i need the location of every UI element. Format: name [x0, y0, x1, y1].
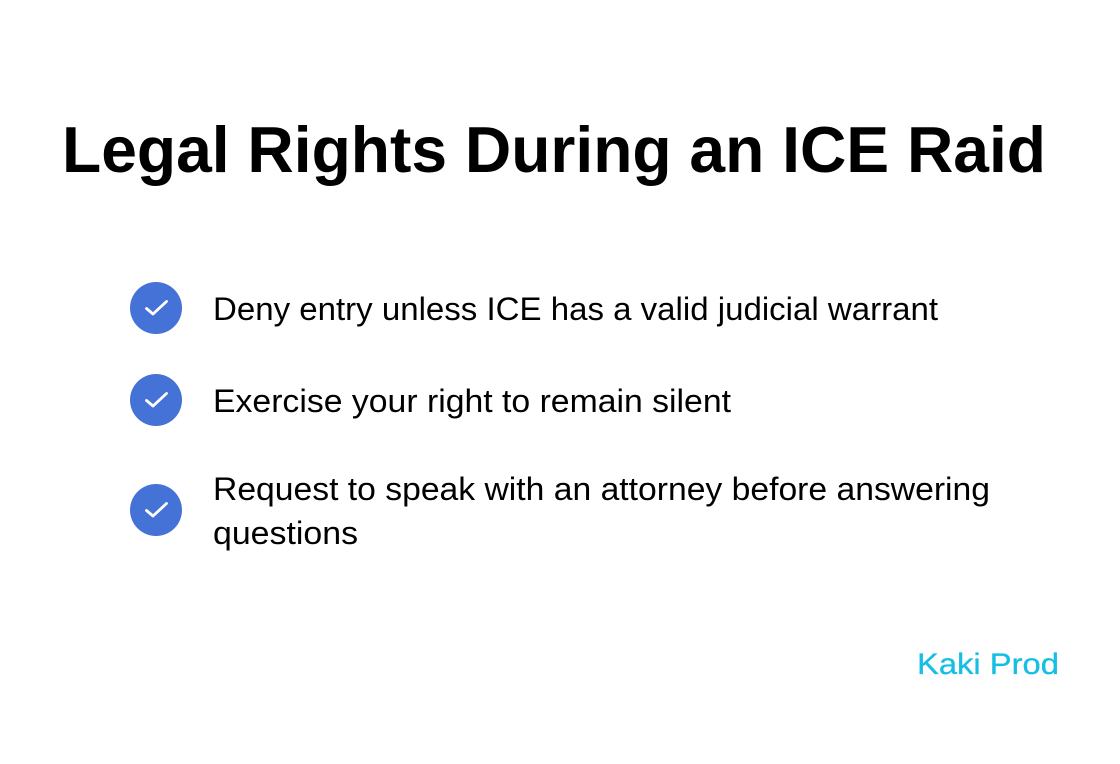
item 2: remain silent — [130, 374, 731, 426]
item 1: deny entry — [130, 282, 938, 334]
text: request attorney — [213, 471, 990, 551]
icon: check circle 2 — [130, 374, 182, 426]
text: request attorney: questions — [213, 515, 358, 551]
logo: Kaki Prod: Kaki Prod — [917, 648, 1059, 681]
title: Legal Rights During an ICE Raid — [62, 113, 1046, 186]
text: deny entry: Deny entry unless ICE has a valid judicial warrant — [213, 291, 938, 327]
icon: check circle 1 — [130, 282, 182, 334]
text: remain silent: Exercise your right to remain silent — [213, 383, 731, 419]
checklist — [130, 282, 990, 551]
item 3: request attorney — [130, 471, 990, 551]
text: request attorney: Request to speak with an attorney before answering — [213, 471, 990, 507]
icon: check circle 3 — [130, 484, 182, 536]
